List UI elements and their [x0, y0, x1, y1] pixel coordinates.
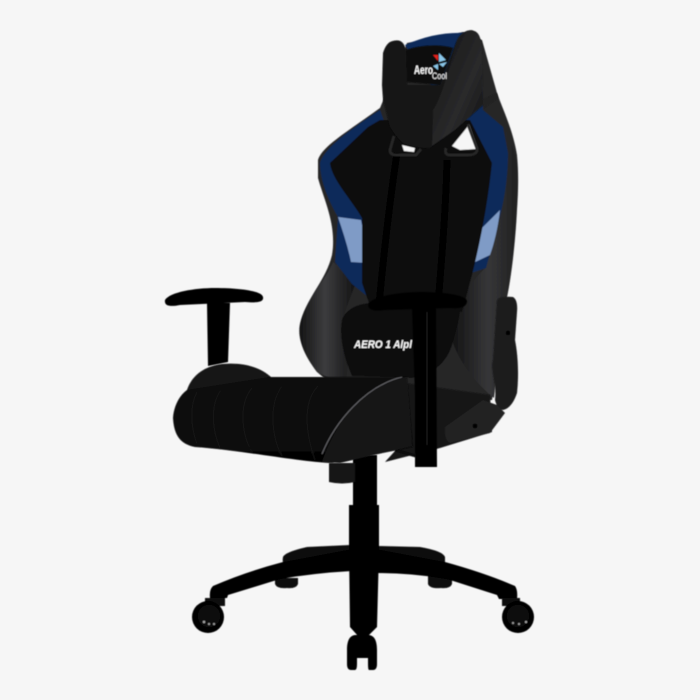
under seat mechanism [385, 383, 492, 462]
left bolster [187, 364, 300, 400]
rear caster right [428, 576, 452, 588]
side tilt bracket [385, 297, 518, 462]
fabric channel lines [379, 153, 447, 305]
base leg right [376, 549, 517, 599]
logo icon [433, 53, 447, 70]
backrest [299, 32, 518, 400]
seat channel seams [192, 386, 318, 460]
armrest pad [165, 288, 263, 306]
mounting loops [390, 124, 477, 155]
chair base [192, 455, 534, 670]
seat strut [395, 450, 416, 456]
left armrest [165, 288, 263, 366]
lumbar text: AERO 1 Alpl [353, 339, 413, 351]
seat cushion [173, 364, 413, 463]
rear caster left [275, 578, 298, 588]
logo panel [406, 46, 453, 85]
bracket pivot hole [506, 331, 510, 335]
armrest pad [368, 292, 467, 311]
armrest post [207, 303, 230, 366]
gas lift cylinder [349, 455, 379, 636]
leather side left [300, 262, 356, 385]
post highlight [426, 312, 428, 445]
headrest [382, 30, 498, 155]
blue panel top [405, 33, 508, 274]
caster wheel left [192, 598, 225, 633]
lower pivot hole [473, 424, 477, 428]
headrest body [382, 30, 483, 148]
window gap right [452, 125, 477, 150]
right wing leather [432, 30, 483, 146]
armrest post [412, 308, 437, 467]
leather side right [452, 130, 518, 398]
logo wordmark: Aero [414, 65, 433, 77]
bracket upper plate [492, 297, 518, 410]
front right bolster [322, 377, 412, 463]
base cover left [283, 545, 350, 564]
headrest straps [482, 93, 498, 108]
blue panel left [320, 110, 385, 300]
light blue stripe left [338, 217, 368, 263]
right armrest [368, 292, 467, 467]
seat body [173, 377, 413, 463]
caster wheel front [347, 635, 377, 670]
bolster highlight [322, 377, 402, 454]
height adjust knob [329, 463, 355, 484]
base leg left [210, 549, 352, 598]
bracket lower plate [445, 400, 505, 443]
window gap left [402, 145, 415, 152]
lumbar pillow [341, 303, 460, 378]
center fabric panel [330, 120, 492, 312]
base cover right [378, 546, 445, 566]
backrest outer shell [299, 32, 518, 400]
light blue stripe right [471, 210, 500, 264]
caster wheel right [502, 598, 534, 633]
logo wordmark second line: Cool [432, 71, 447, 81]
